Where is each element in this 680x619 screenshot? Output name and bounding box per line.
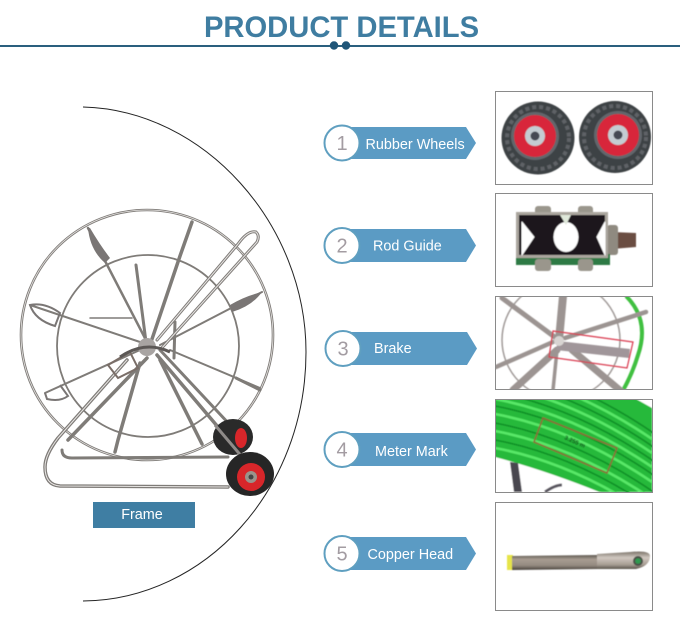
badge 2: rod guide	[324, 228, 476, 263]
badge 5: copper head	[324, 536, 476, 571]
badge 5: copper head: 5	[336, 544, 348, 566]
badge 4: meter mark: 4	[336, 440, 348, 462]
badge 4: meter mark: Meter Mark	[375, 444, 449, 460]
badge 3: brake: Brake	[374, 341, 412, 357]
photo: meter mark	[495, 399, 653, 493]
title: PRODUCT DETAILS	[204, 12, 479, 44]
badge 3: brake: 3	[337, 338, 349, 360]
large curved arc	[83, 107, 306, 601]
photo: copper head	[496, 502, 652, 610]
reel rings	[21, 210, 273, 460]
badge 1: rubber wheels	[324, 126, 476, 160]
photo: rubber wheels	[496, 92, 652, 184]
photo: rod guide	[496, 194, 652, 286]
badge 3: brake	[326, 331, 477, 366]
front wheel	[226, 452, 274, 496]
badge 1: rubber wheels: 1	[336, 133, 348, 155]
photo: meter mark: 3.255 m	[563, 435, 586, 450]
reel handle	[157, 232, 258, 350]
left wheel	[502, 102, 574, 174]
title divider with dots	[0, 41, 680, 50]
photo: brake	[495, 296, 653, 390]
reel spokes	[30, 222, 262, 400]
frame label: Frame	[121, 507, 163, 523]
badge 2: rod guide: Rod Guide	[373, 238, 442, 254]
right wheel	[579, 101, 651, 173]
frame label	[93, 502, 195, 528]
badge 4: meter mark	[324, 432, 476, 467]
frame reel photo illustration	[21, 210, 274, 496]
frame legs	[45, 338, 246, 487]
badge 5: copper head: Copper Head	[368, 547, 453, 563]
badge 1: rubber wheels: Rubber Wheels	[366, 137, 465, 153]
back wheel	[213, 419, 253, 458]
badge 2: rod guide: 2	[336, 236, 348, 258]
